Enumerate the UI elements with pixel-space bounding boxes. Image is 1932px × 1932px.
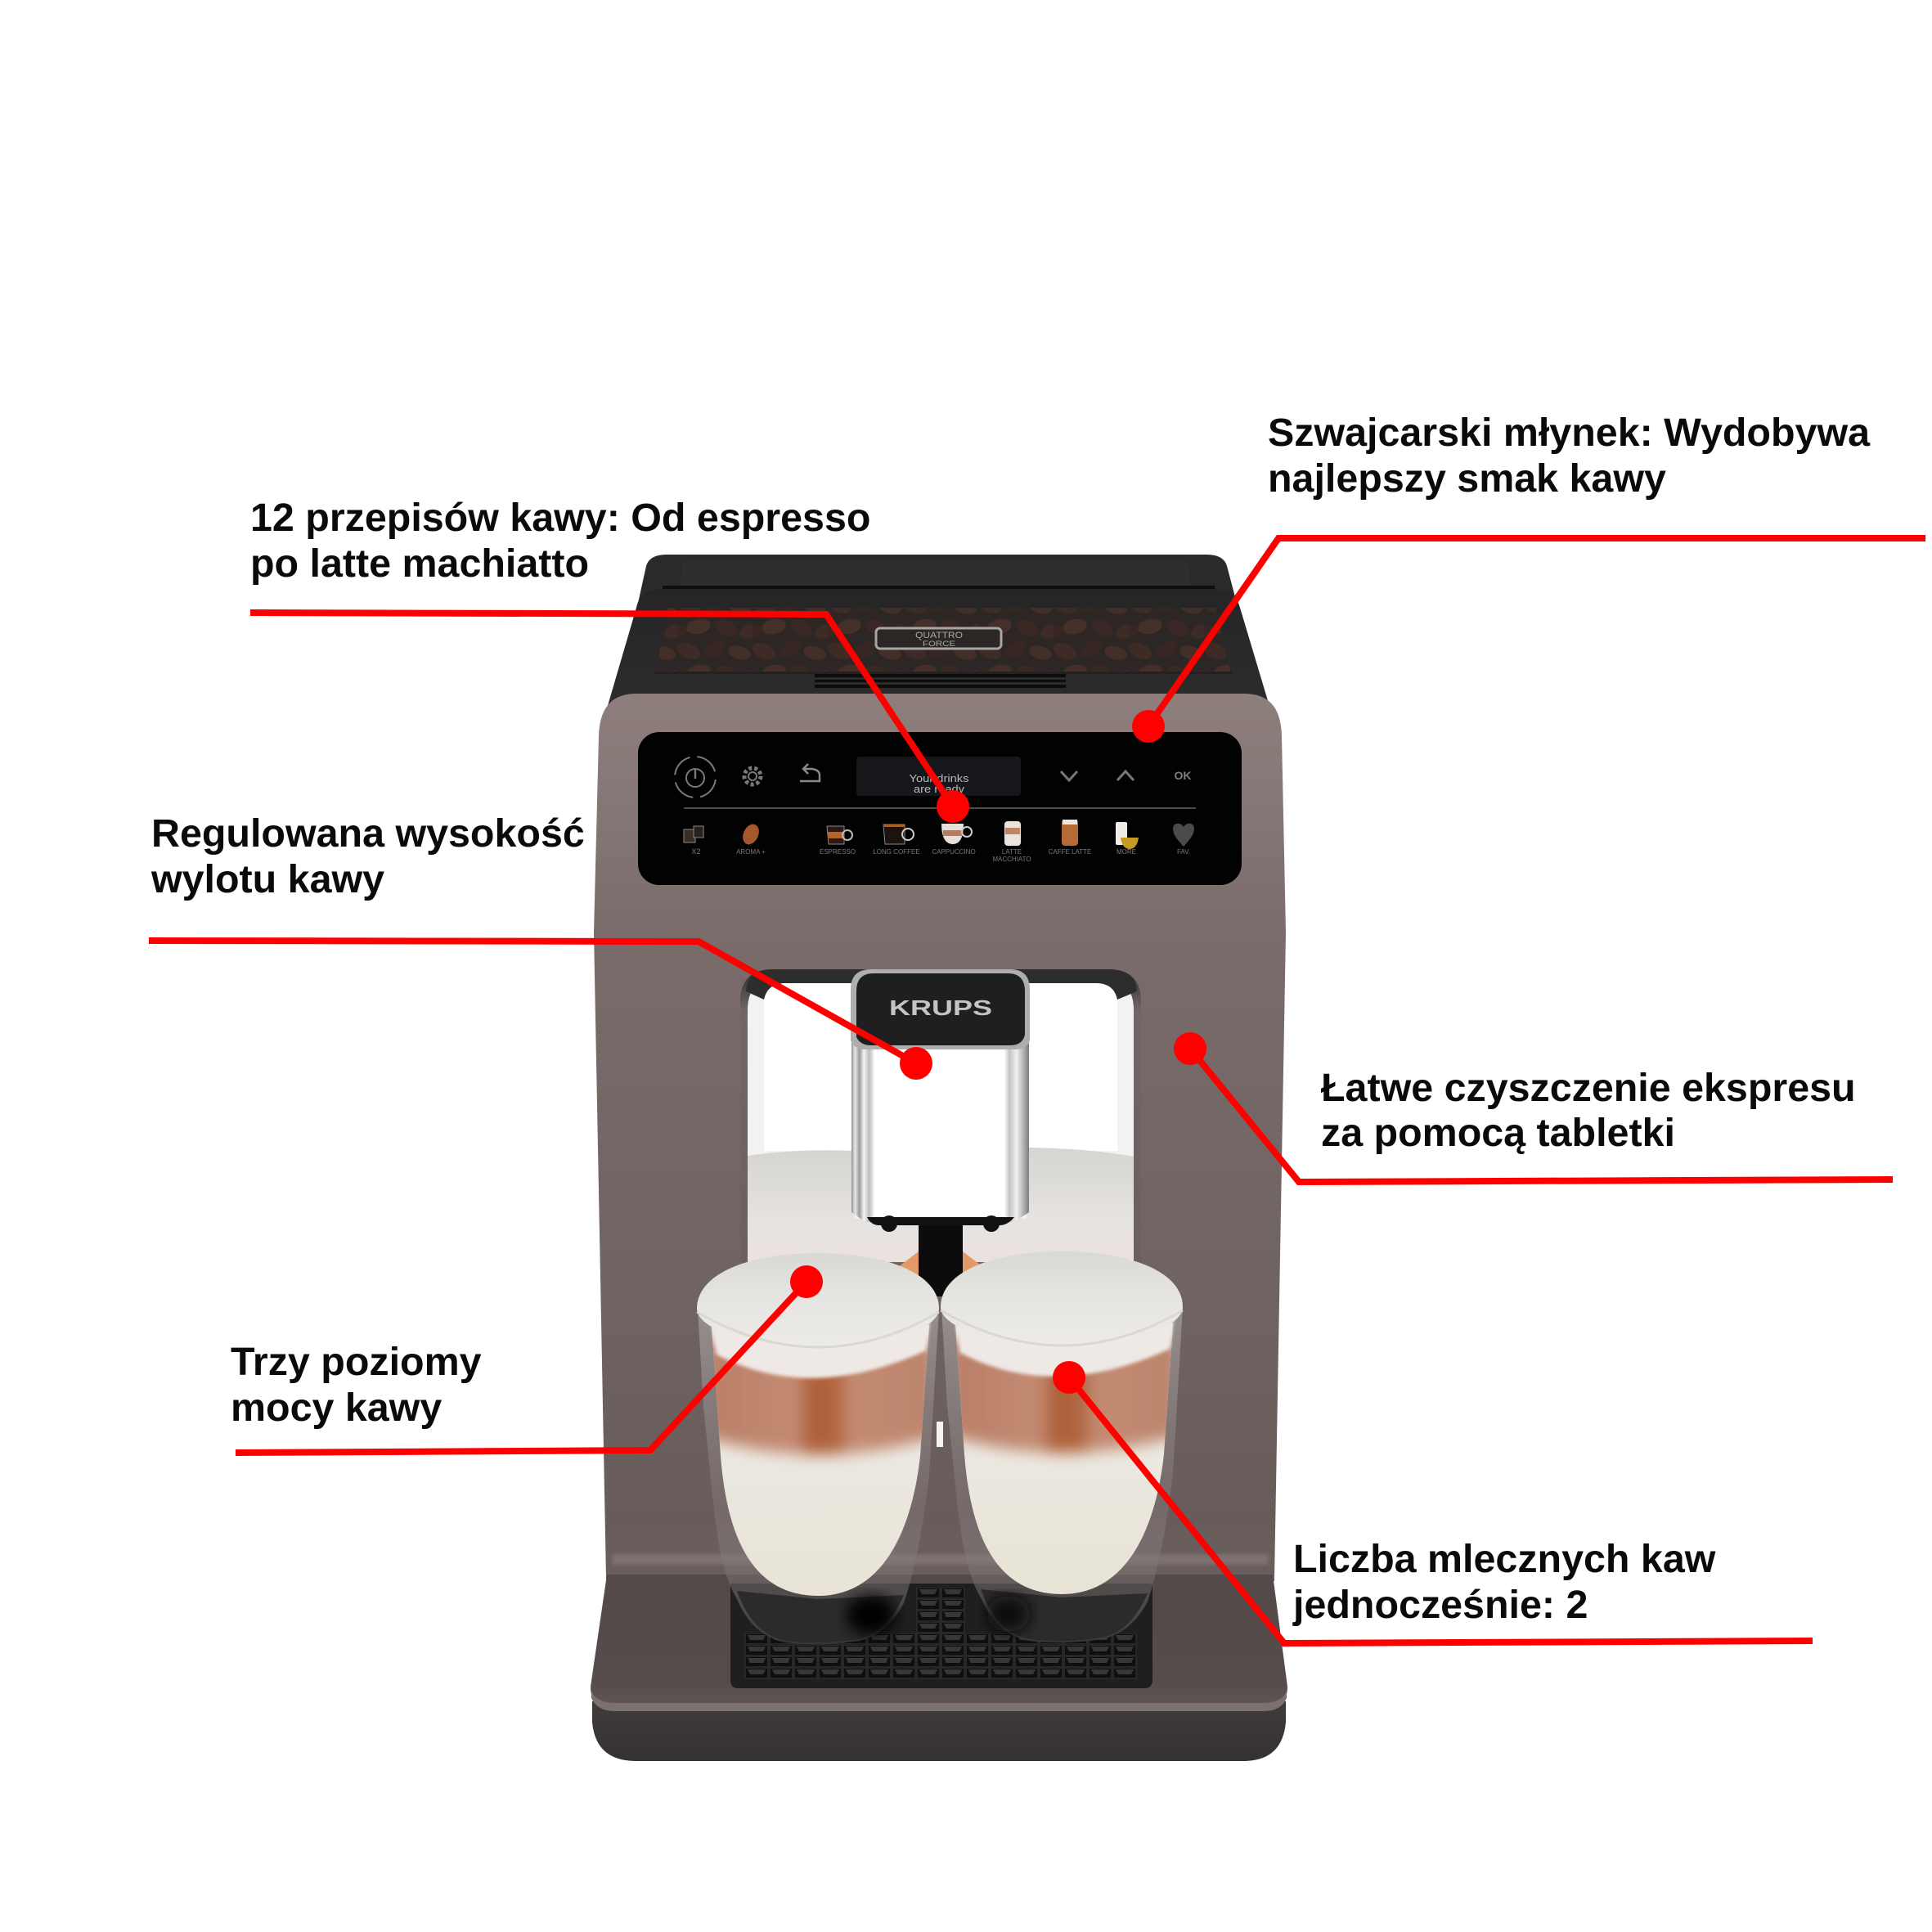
X2: [684, 826, 703, 856]
logo: KRUPS: [889, 995, 992, 1020]
heading: Swiss grinder: Szwajcarski młynek: Wydobywa: [1268, 411, 1870, 455]
icon: up chevron: [1117, 771, 1134, 780]
Latte macchiato: LATTE: [1002, 848, 1022, 856]
Long coffee: LONG COFFEE: [873, 848, 920, 856]
marker dot: [1053, 1361, 1085, 1394]
milk foam crown: [708, 1301, 932, 1378]
bean hopper: [601, 589, 1276, 728]
beans window: [656, 608, 1230, 672]
divider: [684, 807, 1196, 809]
display: are ready: [914, 783, 965, 795]
Long coffee: [873, 824, 920, 856]
stem: [919, 1223, 963, 1296]
Aroma: [736, 821, 766, 856]
marker dot: [1174, 1032, 1206, 1065]
Espresso: ESPRESSO: [820, 848, 856, 856]
heading: 12 recipes: po latte machiatto: [250, 541, 589, 586]
coffee machine: [591, 555, 1287, 1761]
marker dot: [790, 1265, 823, 1298]
callout: Swiss grinder: [1132, 411, 1925, 743]
coffee layer: [947, 1340, 1180, 1453]
control panel: [638, 732, 1242, 885]
leader line: [236, 1282, 806, 1453]
Espresso: [820, 826, 856, 856]
badge: Quattro Force: QUATTRO: [915, 631, 963, 640]
callout: 12 recipes: [250, 496, 969, 823]
nozzles: [881, 1215, 1000, 1232]
machine body: [594, 694, 1286, 1579]
heading: two milk coffees: Liczba mlecznych kaw: [1293, 1537, 1715, 1581]
display: [856, 757, 1021, 796]
Caffe latte: [1049, 820, 1091, 856]
coffee outlet: [851, 969, 1030, 1232]
heading: adjustable height: Regulowana wysokość: [151, 811, 585, 856]
drip grid: [730, 1584, 1152, 1688]
leader line: [1148, 538, 1925, 726]
X2: X2: [691, 847, 701, 856]
back floor step: [606, 1530, 1274, 1581]
Cappuccino: [932, 824, 976, 856]
heading: easy cleaning: za pomocą tabletki: [1321, 1111, 1675, 1155]
marker dot: [1132, 710, 1165, 743]
heading: 12 recipes: 12 przepisów kawy: Od espresso: [250, 496, 870, 540]
callout: easy cleaning: [1174, 1032, 1893, 1182]
milk: [955, 1323, 1173, 1594]
foam: [941, 1251, 1183, 1346]
Favourite heart: [1173, 824, 1194, 856]
coffee layer: [703, 1341, 937, 1454]
leader line: [149, 941, 916, 1063]
badge: Quattro Force: FORCE: [923, 640, 955, 648]
Favourite heart: FAV.: [1177, 848, 1190, 856]
vent slots: [815, 674, 1066, 688]
glass: [941, 1307, 1183, 1642]
Latte macchiato: MACCHIATO: [992, 856, 1031, 863]
glass dark base: [981, 1589, 1148, 1641]
glass dark base: [737, 1591, 904, 1642]
Caffe latte: CAFFE LATTE: [1049, 848, 1091, 856]
cups behind in recess: [748, 1148, 1134, 1276]
icon: power: [675, 757, 716, 798]
marker dot: [937, 790, 969, 823]
Aroma: AROMA +: [736, 848, 766, 856]
coffee outlet recess: [740, 969, 1141, 1262]
heading: easy cleaning: Łatwe czyszczenie ekspresu: [1321, 1066, 1856, 1110]
outlet head: [851, 969, 1030, 1049]
leader line: [250, 613, 953, 806]
icon: down chevron: [1061, 771, 1077, 780]
Cappuccino: CAPPUCCINO: [932, 848, 976, 856]
leader line: [1190, 1049, 1893, 1182]
OK label: OK: [1175, 769, 1191, 782]
heading: two milk coffees: jednocześnie: 2: [1292, 1583, 1588, 1627]
heading: three strength levels: Trzy poziomy: [231, 1340, 482, 1384]
Latte macchiato: [992, 821, 1031, 863]
More: [1116, 822, 1139, 856]
heading: Swiss grinder: najlepszy smak kawy: [1268, 456, 1666, 501]
More: MORE: [1117, 848, 1136, 856]
heading: three strength levels: mocy kawy: [231, 1386, 442, 1430]
glass: [698, 1309, 939, 1644]
slit behind cups: [937, 1422, 943, 1447]
leader line: [1069, 1377, 1813, 1643]
drink buttons: [684, 820, 1194, 863]
display: Your drinks: [910, 772, 969, 784]
icon: settings gear: [744, 768, 761, 784]
callout: adjustable height: [149, 811, 932, 1080]
icon: back arrow: [800, 764, 820, 781]
milk: [712, 1325, 929, 1596]
right cup: [941, 1251, 1183, 1642]
marker dot: [900, 1047, 932, 1080]
callout: two milk coffees: [1053, 1361, 1813, 1643]
badge: Quattro Force: [876, 628, 1001, 649]
milk foam crown: [952, 1299, 1176, 1377]
lid: [634, 555, 1242, 622]
callout: three strength levels: [231, 1265, 823, 1453]
heading: adjustable height: wylotu kawy: [151, 857, 384, 901]
foam: [697, 1253, 939, 1348]
left cup: [697, 1253, 939, 1644]
drip tray base: [591, 1575, 1287, 1761]
